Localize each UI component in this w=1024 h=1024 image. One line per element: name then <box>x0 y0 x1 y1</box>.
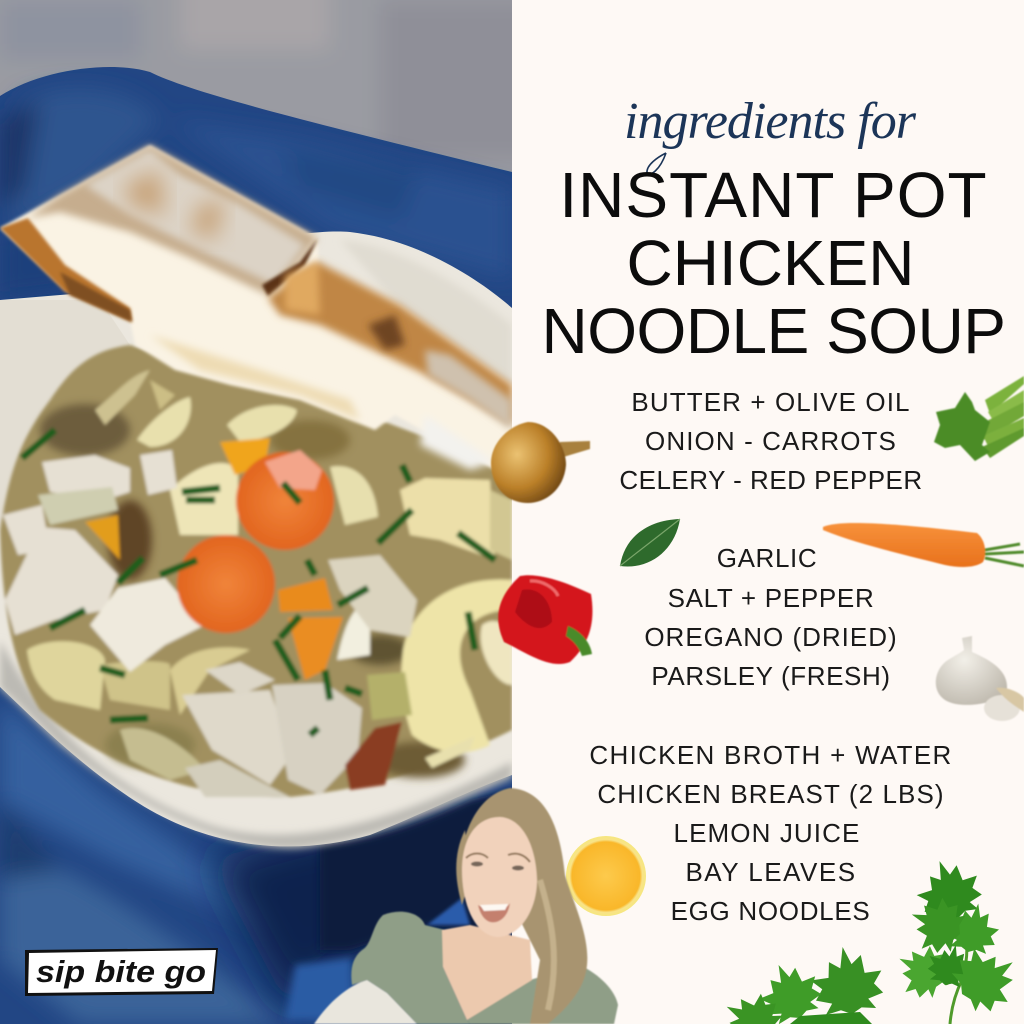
soup filling <box>0 345 512 797</box>
icon: red pepper <box>498 575 592 664</box>
icon: parsley left sprig <box>712 942 887 1024</box>
title: main heading: INSTANT POT <box>559 159 988 231</box>
icon: garlic <box>936 636 1024 721</box>
photo: woman host <box>314 788 618 1024</box>
ingredient group 3: LEMON JUICE <box>674 818 860 848</box>
bread slice <box>0 145 512 470</box>
ingredient group 3: CHICKEN BROTH + WATER <box>589 740 953 770</box>
ingredient group 2: GARLIC <box>717 543 817 573</box>
ingredient group 3: EGG NOODLES <box>671 896 870 926</box>
ingredient group 3 <box>589 740 953 926</box>
carrots and vegetables <box>85 438 412 790</box>
ingredient group 1 <box>619 387 923 495</box>
ingredient group 1: BUTTER + OLIVE OIL <box>631 387 911 417</box>
icon: celery <box>934 376 1024 461</box>
ingredient group 1: ONION - CARROTS <box>645 426 897 456</box>
icon: parsley right sprig <box>887 852 1024 1024</box>
chicken pieces <box>3 450 417 797</box>
title: main heading: NOODLE SOUP <box>542 295 1005 367</box>
ingredient group 2 <box>644 543 898 691</box>
logo: sip bite go <box>25 948 218 996</box>
title: main heading <box>542 159 1005 367</box>
icon: carrot <box>823 523 1024 567</box>
noodles <box>27 370 512 780</box>
white bowl <box>0 232 512 848</box>
ingredient group 3: BAY LEAVES <box>685 857 857 887</box>
icon: onion <box>491 422 590 503</box>
ingredient group 2: PARSLEY (FRESH) <box>651 661 891 691</box>
ingredient group 3: CHICKEN BREAST (2 LBS) <box>597 779 945 809</box>
title: script line: ingredients for <box>624 93 917 150</box>
ingredient group 1: CELERY - RED PEPPER <box>619 465 923 495</box>
chives and herbs <box>22 430 495 735</box>
photo: bowl of chicken noodle soup with bread on blue napkin <box>0 0 512 1024</box>
background: stone surface <box>0 0 550 210</box>
ingredient group 2: SALT + PEPPER <box>668 583 874 613</box>
icon: lemon slice <box>566 836 646 916</box>
blue napkin <box>0 67 512 1024</box>
icon: bay leaf <box>620 519 680 567</box>
ingredient group 2: OREGANO (DRIED) <box>644 622 898 652</box>
title: main heading: CHICKEN <box>626 227 915 299</box>
logo: sip bite go: sip bite go <box>36 954 206 989</box>
